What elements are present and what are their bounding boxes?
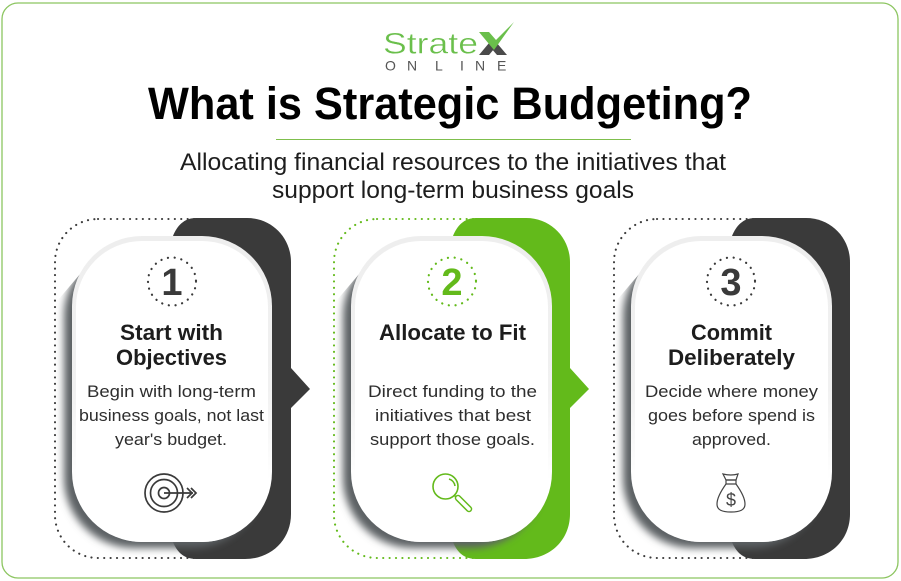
dotted outline — [614, 219, 794, 558]
logo wordmark: Strate — [383, 28, 478, 60]
dark back shape — [732, 218, 850, 559]
green back shape with arrow — [453, 218, 589, 559]
white card — [72, 236, 272, 542]
heading: Start with — [120, 320, 223, 345]
card shadow — [343, 246, 542, 548]
icon: target with arrow — [145, 474, 196, 512]
heading — [116, 320, 227, 370]
description — [368, 382, 537, 449]
divider — [276, 139, 631, 140]
dotted outline — [334, 219, 514, 558]
heading: Deliberately — [668, 345, 796, 370]
heading: Commit — [691, 320, 773, 345]
description: initiatives that best — [375, 406, 531, 425]
description: business goals, not last — [79, 406, 264, 425]
number badge: 3 — [720, 262, 742, 304]
heading: Objectives — [116, 345, 227, 370]
logo X mark — [479, 22, 514, 55]
number badge — [707, 258, 755, 306]
icon: magnifying glass — [433, 474, 469, 509]
panel: step 2 — [334, 218, 589, 559]
logo subtitle: ONLINE — [385, 58, 506, 74]
description: approved. — [692, 430, 771, 449]
number badge: 1 — [161, 262, 183, 304]
dotted outline — [55, 219, 235, 558]
description: Direct funding to the — [368, 382, 537, 401]
subtitle — [180, 149, 726, 204]
heading: Allocate to Fit — [379, 320, 527, 345]
card shadow — [617, 274, 807, 554]
description: year's budget. — [115, 430, 227, 449]
description — [645, 382, 819, 449]
description: Begin with long-term — [87, 382, 256, 401]
subtitle: Allocating financial resources to the initiatives that — [180, 149, 726, 176]
dark back shape with arrow — [173, 218, 310, 559]
number badge — [428, 258, 476, 306]
number badge: 2 — [441, 262, 463, 304]
logo — [383, 22, 514, 74]
description: goes before spend is — [648, 406, 815, 425]
description: Decide where money — [645, 382, 819, 401]
description: support those goals. — [370, 430, 535, 449]
panel: step 3 — [614, 218, 850, 559]
card shadow — [58, 274, 247, 554]
white card — [631, 236, 832, 542]
description — [79, 382, 264, 449]
title: What is Strategic Budgeting? — [148, 78, 752, 129]
icon: money bag: $ — [726, 490, 736, 510]
subtitle: support long-term business goals — [272, 177, 634, 204]
panel: step 1 — [55, 218, 310, 559]
white card — [351, 236, 552, 542]
icon: money bag — [717, 474, 745, 512]
heading — [668, 320, 796, 370]
number badge — [148, 258, 196, 306]
